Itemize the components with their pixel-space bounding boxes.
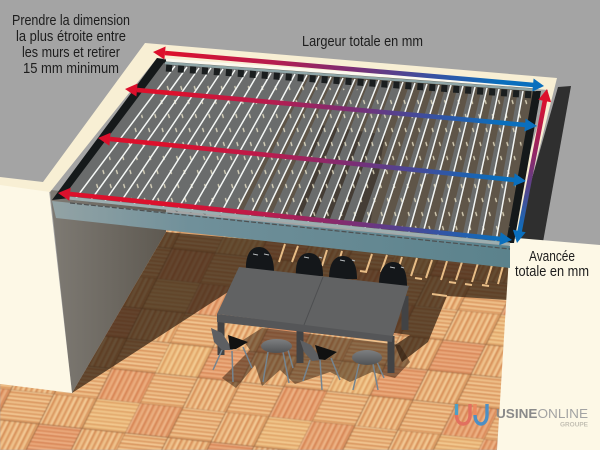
- front beam: [52, 198, 510, 268]
- left black gap: [52, 58, 168, 200]
- logo wordmark: USINE ONLINE: [496, 407, 588, 421]
- back chair 1: [246, 247, 274, 272]
- view through to the floor: [290, 125, 385, 225]
- back chair 3: [329, 256, 357, 279]
- chair highlights: [253, 254, 404, 268]
- table legs: [221, 296, 405, 373]
- note: narrowest dimension: Prendre la dimension: [12, 13, 130, 29]
- logo subtitle: GROUPE: [560, 422, 588, 428]
- table top: [217, 267, 409, 336]
- roof cavity: [62, 60, 535, 243]
- front stool 2: [352, 350, 384, 390]
- back chair 2: [296, 253, 323, 276]
- note: narrowest dimension: les murs et retirer: [22, 45, 120, 61]
- grey blades right: [362, 83, 520, 241]
- note: narrowest dimension: la plus étroite entre: [16, 29, 126, 45]
- white blade edges: [76, 66, 523, 241]
- label: total depth: totale en mm: [515, 264, 589, 280]
- shadow on floor: [72, 232, 512, 393]
- top rail shadow teeth: [166, 68, 534, 95]
- louvred roof: [52, 58, 541, 243]
- table apron: [217, 314, 393, 342]
- label: total width: Largeur totale en mm: [302, 34, 423, 50]
- arrow 2: [125, 84, 537, 132]
- arrow 1: [153, 46, 544, 92]
- arrow 3: [98, 133, 526, 186]
- depth arrow: [513, 89, 551, 243]
- small light dashes: [80, 78, 528, 238]
- back chair 4: [379, 262, 407, 286]
- width arrows: [58, 46, 544, 245]
- right wall face: [497, 238, 600, 450]
- front chair 2: [300, 340, 340, 390]
- front stool 1: [261, 339, 293, 383]
- table centre seam: [304, 277, 323, 325]
- top rail white: [166, 60, 537, 87]
- grey blades middle: [230, 75, 398, 226]
- right black gap: [506, 91, 541, 243]
- wall cast shadow on ground: [515, 86, 571, 242]
- light stripes under the louvres: [279, 244, 503, 284]
- light dashes on floor: [360, 271, 489, 296]
- beam top rail: [68, 198, 510, 244]
- beam face: [52, 201, 510, 268]
- wall top surface: [0, 43, 557, 238]
- label: total depth: Avancée: [529, 249, 575, 265]
- left wall face: [0, 182, 72, 393]
- beam groove: [70, 203, 510, 249]
- note: narrowest dimension: [12, 13, 130, 77]
- inner wall face: [50, 190, 166, 393]
- arrow 4: [58, 188, 512, 245]
- table with benches: [211, 247, 410, 390]
- front chair 1: [211, 328, 252, 382]
- logo: Usine Online Groupe: [456, 404, 588, 428]
- note: narrowest dimension: 15 mm minimum: [23, 61, 119, 77]
- grey blades left: [70, 66, 289, 213]
- floor shadows under table: [222, 328, 410, 388]
- top rail teal: [165, 63, 536, 90]
- grey backing of closed louvres: [62, 60, 307, 214]
- logo mark: [456, 404, 487, 424]
- wooden floor tiles: [0, 230, 512, 450]
- label: total depth: [515, 249, 589, 280]
